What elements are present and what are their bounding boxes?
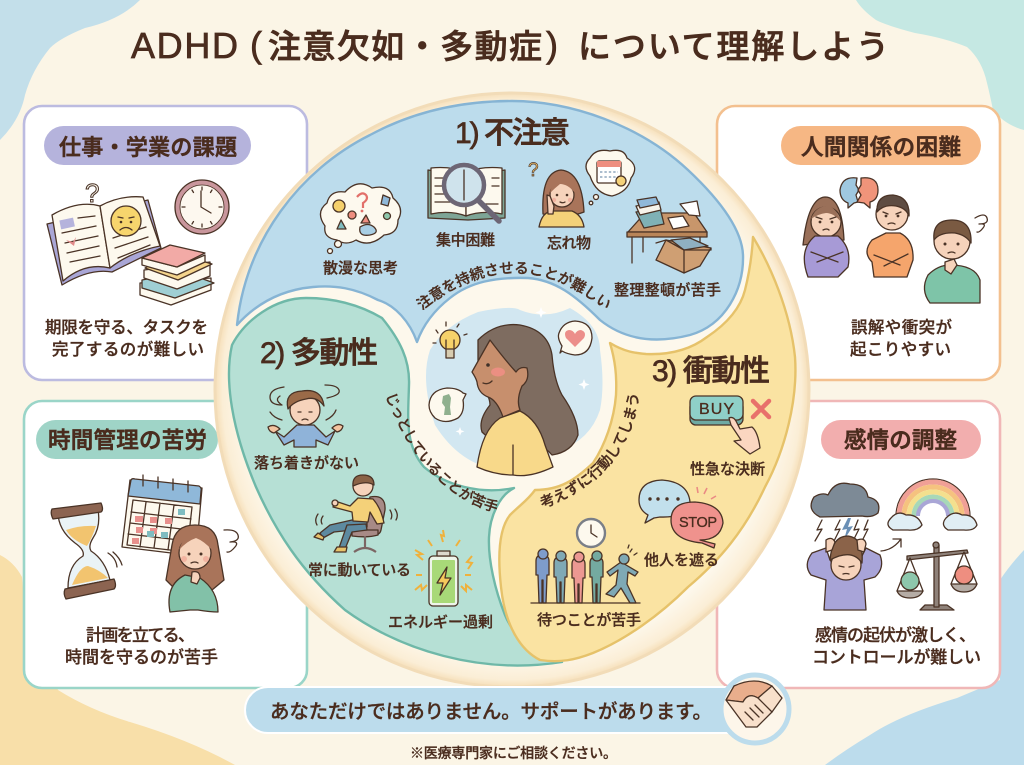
heading pill: work and study: 仕事・学業の課題 <box>59 135 237 160</box>
heading pill: emotion regulation <box>821 420 981 459</box>
panel: work and study <box>24 106 307 380</box>
sparkles <box>456 307 590 436</box>
label: interrupting others: 他人を遮る <box>644 552 719 569</box>
heading pill: relationships: 人間関係の困難 <box>801 135 961 160</box>
title <box>131 24 889 66</box>
segment: inattention <box>236 100 744 344</box>
label: always moving: 常に動いている <box>308 562 411 579</box>
title: について理解しよう <box>578 28 889 65</box>
icon: heart bubble <box>558 321 592 355</box>
label: excess energy: エネルギー過剰 <box>388 614 493 631</box>
icon: interrupting speech bubbles: STOP <box>679 515 717 531</box>
heading pill: emotion regulation: 感情の調整 <box>844 427 957 453</box>
title: ADHD <box>131 25 238 66</box>
label: scattered thoughts: 散漫な思考 <box>323 260 398 277</box>
icon: forgetful girl: ? <box>528 160 539 181</box>
icon: buy button and cross <box>690 396 769 454</box>
icon: light bulb <box>433 322 467 358</box>
icon: open book with worried face <box>47 178 161 285</box>
support banner: あなただけではありません。サポートがあります。 <box>270 701 712 723</box>
text: relationships: 誤解や衝突が <box>851 317 952 337</box>
icon: handshake <box>721 675 789 743</box>
icon: storm cloud <box>811 483 879 541</box>
icon: interrupting speech bubbles <box>639 480 723 548</box>
icon: buy button and cross: BUY <box>699 401 734 418</box>
icon: overcharged battery <box>415 530 472 606</box>
icon: calendar <box>122 475 202 556</box>
heading pill: work and study <box>44 126 251 165</box>
label: difficulty concentrating: 集中困難 <box>436 232 495 249</box>
icon: arguing man <box>867 195 913 277</box>
label: forgetting things: 忘れ物 <box>547 235 591 252</box>
text: relationships <box>850 317 952 359</box>
panel: relationships <box>717 106 1000 380</box>
icon: stack of books <box>140 245 214 305</box>
icon: wall clock <box>175 180 229 234</box>
text: time management <box>65 626 218 667</box>
label: restless: 落ち着きがない <box>254 454 359 472</box>
label: hasty decisions: 性急な決断 <box>690 460 765 478</box>
icon: fidget bubble <box>429 388 466 422</box>
arrow: storm to rainbow <box>881 539 901 551</box>
icon: restless boy <box>268 385 343 447</box>
support banner <box>245 675 789 743</box>
panel: emotion regulation <box>717 401 1000 688</box>
icon: confused boy <box>924 215 987 303</box>
center illustration: woman profile <box>426 307 602 476</box>
text: work and study: 完了するのが難しい <box>52 339 204 359</box>
icon: hourglass <box>51 503 122 599</box>
curved text: hyperactivity: じっとしていることが苦手 <box>386 394 498 512</box>
icon: forgetful girl <box>528 150 635 227</box>
icon: worried woman <box>166 525 238 612</box>
heading pill: time management <box>36 420 218 459</box>
icon: scattered thought cloud <box>320 184 401 254</box>
title: ( <box>250 24 262 65</box>
heading: inattention: 1) 不注意 <box>455 117 570 150</box>
central circle diagram <box>214 92 810 686</box>
text: time management: 計画を立てる、 <box>86 626 195 645</box>
text: relationships: 起こりやすい <box>850 340 951 359</box>
text: emotion regulation: 感情の起伏が激しく、 <box>815 625 976 645</box>
icon: rainbow <box>888 479 977 530</box>
title: 注意欠如・多動症 <box>268 28 542 65</box>
text: emotion regulation <box>812 625 981 667</box>
segment: hyperactivity <box>228 296 564 667</box>
icon: person holding head <box>807 536 882 610</box>
label: poor at organizing: 整理整頓が苦手 <box>614 281 721 299</box>
icon: book with magnifier <box>428 165 505 221</box>
title: ) <box>546 24 558 65</box>
icon: balance scale <box>897 542 977 610</box>
footnote: ※医療専門家にご相談ください。 <box>410 745 617 761</box>
curved text: impulsivity: 考えずに行動してしまう <box>540 395 639 507</box>
heading pill: relationships <box>781 126 981 165</box>
label: poor at waiting: 待つことが苦手 <box>537 611 641 629</box>
icon: broken speech bubbles <box>840 178 878 208</box>
icon: messy desk and box <box>627 197 711 273</box>
heading: impulsivity: 3) 衝動性 <box>652 355 770 388</box>
segment: impulsivity <box>498 236 797 662</box>
icon: open book with worried face: ? <box>85 178 99 208</box>
heading: hyperactivity: 2) 多動性 <box>260 337 378 370</box>
curved text: inattention: 注意を持続させることが難しい <box>416 262 610 310</box>
heading pill: time management: 時間管理の苦労 <box>48 428 207 453</box>
text: work and study <box>45 318 208 359</box>
text: time management: 時間を守るのが苦手 <box>65 647 218 667</box>
text: emotion regulation: コントロールが難しい <box>812 647 981 667</box>
icon: clock and waiting line <box>531 519 640 603</box>
icon: arguing woman <box>803 197 849 277</box>
icon: fidgeting person in chair <box>314 475 397 552</box>
panel: time management <box>24 401 307 688</box>
text: work and study: 期限を守る、タスクを <box>45 318 208 337</box>
